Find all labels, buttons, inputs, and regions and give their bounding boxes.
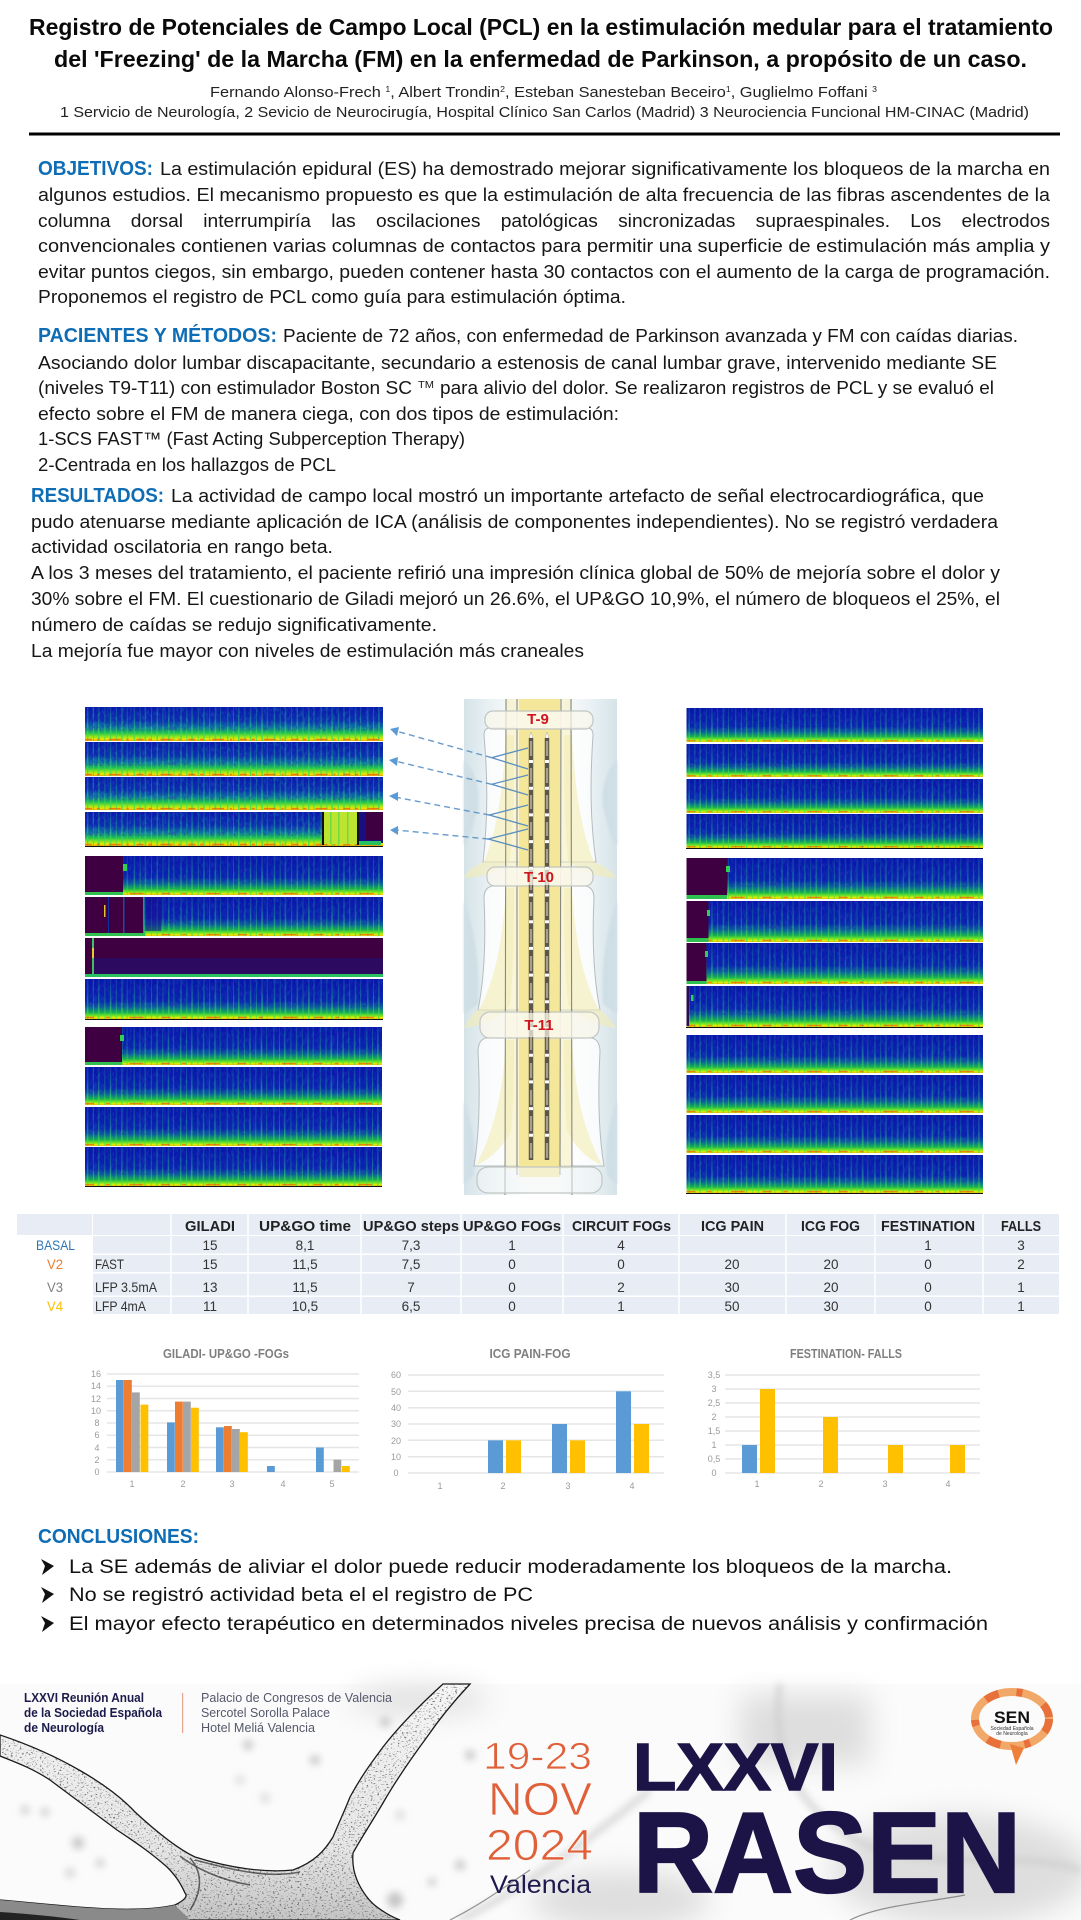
spectrograms: left column: [85, 707, 383, 1186]
row: V4: 10,5: [292, 1299, 318, 1314]
text block: resultados: pudo atenuarse mediante aplicación de ICA (análisis de componentes independientes). No se registró verdadera: [31, 512, 999, 532]
row: V4: 6,5: [402, 1299, 420, 1314]
row: V3: 7: [407, 1280, 415, 1295]
dates: 2024: [486, 1821, 593, 1870]
blurred neuron background: [21, 1684, 1081, 1920]
spectrograms: right column: [686, 708, 983, 1194]
bar chart: GILADI UP&GO FOGs: 0: [94, 1467, 100, 1477]
text block: objetivos: convencionales contienen varias columnas de contactos para permitir una superficie de estimulación más amplia y: [38, 236, 1050, 256]
table header: CIRCUIT FOGs: [572, 1218, 671, 1235]
spine illustration with electrode: [464, 699, 617, 1195]
text block: objetivos: columna dorsal interrumpiría las oscilaciones patológicas sincronizadas supraespinales. Los electrodos: [38, 211, 1050, 231]
bar chart: FESTINATION FALLS: 2: [711, 1412, 717, 1422]
bar chart: FESTINATION FALLS: 1,5: [708, 1426, 720, 1436]
authors and affiliations: Fernando Alonso-Frech: [210, 84, 367, 101]
text block: resultados: A los 3 meses del tratamiento, el paciente refirió una impresión clínica global de 50% de mejoría sobre el dolor y: [31, 563, 1000, 583]
row: V2: 2: [1017, 1257, 1025, 1272]
vertebra outlines: [474, 728, 604, 1166]
row: V2: 0: [617, 1257, 625, 1272]
text block: pacientes y metodos: 1-SCS FAST™ (Fast Acting Subperception Therapy): [38, 429, 465, 449]
bar chart: ICG PAIN-FOG: 0: [393, 1468, 399, 1478]
bar chart: ICG PAIN-FOG: 3: [565, 1481, 571, 1491]
text block: resultados: número de caídas se redujo significativamente.: [31, 615, 437, 635]
row: basal: BASAL: [36, 1237, 75, 1253]
row: V2: 20: [724, 1257, 740, 1272]
SEN logo: de Neurología: [996, 1731, 1028, 1737]
bar chart: GILADI UP&GO FOGs: 14: [91, 1381, 101, 1391]
bar chart: ICG PAIN-FOG: 1: [437, 1481, 443, 1491]
nerve lines: [505, 699, 572, 1195]
bar chart: GILADI UP&GO FOGs: 8: [94, 1418, 100, 1428]
text block: pacientes y metodos: efecto sobre el FM de manera ciega, con dos tipos de estimulación:: [38, 404, 619, 424]
row: V4: 30: [823, 1299, 839, 1314]
title: [29, 14, 1053, 72]
bar chart: GILADI UP&GO FOGs: 3: [229, 1479, 235, 1489]
bar chart: ICG PAIN-FOG: 10: [391, 1452, 401, 1462]
data table: [17, 1214, 1059, 1314]
text block: resultados: La actividad de campo local mostró un importante artefacto de señal electrocardiográfica, que: [171, 486, 984, 506]
table header: FESTINATION: [881, 1218, 975, 1235]
level label T-9: T-9: [527, 711, 549, 728]
text block: resultados: [31, 485, 1000, 661]
event name: LXXVI: [633, 1730, 838, 1805]
row: V4: 11: [203, 1299, 217, 1314]
text block: pacientes y metodos: 2-Centrada en los hallazgos de PCL: [38, 455, 336, 475]
row: V2: FAST: [95, 1256, 124, 1272]
dates: Valencia: [490, 1871, 591, 1899]
bar chart: GILADI UP&GO FOGs: 16: [91, 1369, 101, 1379]
arrows: contact pairs to spectrograms: [389, 727, 528, 850]
row: V2: 11,5: [292, 1257, 318, 1272]
authors and affiliations: , Albert Trondin: [390, 84, 500, 101]
SEN logo: [975, 1692, 1049, 1765]
authors and affiliations: 1 Servicio de Neurología, 2 Sevicio de Neurocirugía, Hospital Clínico San Carlos (Madrid) 3 Neurociencia Funcional HM-CINAC (Madrid): [60, 104, 1029, 121]
row: V3: V3: [47, 1279, 63, 1295]
SEN logo: Sociedad Española: [990, 1726, 1034, 1732]
venue block: de Neurología: [24, 1720, 105, 1735]
text block: resultados: La mejoría fue mayor con niveles de estimulación más craneales: [31, 641, 584, 661]
row: V3: LFP 3.5mA: [95, 1279, 158, 1295]
table header: UP&GO time: [259, 1218, 351, 1235]
bar chart: FESTINATION FALLS: [708, 1346, 980, 1489]
text block: conclusiones: CONCLUSIONES:: [38, 1526, 199, 1548]
row: basal: 15: [202, 1238, 218, 1253]
title: Registro de Potenciales de Campo Local (PCL) en la estimulación medular para el tratamiento: [29, 14, 1053, 40]
bar chart: ICG PAIN-FOG: ICG PAIN-FOG: [490, 1346, 570, 1361]
bar chart: GILADI UP&GO FOGs: [91, 1346, 359, 1489]
table header: [185, 1218, 1041, 1235]
row: V2: 0: [508, 1257, 516, 1272]
authors and affiliations: 2: [500, 85, 506, 94]
authors and affiliations: 1: [726, 85, 731, 94]
bar chart: FESTINATION FALLS: FESTINATION- FALLS: [790, 1346, 902, 1361]
row: V4: 50: [724, 1299, 740, 1314]
row: V4: 1: [617, 1299, 625, 1314]
row: V2: 20: [823, 1257, 839, 1272]
bar chart: FESTINATION FALLS: 2,5: [708, 1398, 720, 1408]
spinal cord: [519, 699, 560, 1177]
bar chart: ICG PAIN-FOG: 40: [391, 1403, 401, 1413]
dates: 19-23: [483, 1736, 592, 1778]
row: basal: 1: [508, 1238, 516, 1253]
text block: resultados: 30% sobre el FM. El cuestionario de Giladi mejoró un 26.6%, el UP&GO 10,9%, el número de bloqueos el 25%, el: [31, 589, 1000, 609]
disc overlays at lead: [515, 712, 563, 1037]
venue block: LXXVI Reunión Anual: [24, 1690, 144, 1705]
text block: pacientes y metodos: PACIENTES Y MÉTODOS:: [38, 324, 277, 347]
bar chart: GILADI UP&GO FOGs: 10: [91, 1406, 101, 1416]
bar chart: ICG PAIN-FOG: 60: [391, 1370, 401, 1380]
row: V2: 0: [924, 1257, 932, 1272]
text block: pacientes y metodos: (niveles T9-T11) con estimulador Boston SC: [38, 378, 412, 398]
bar chart: FESTINATION FALLS: 0: [711, 1468, 717, 1478]
bar chart: ICG PAIN-FOG: 20: [391, 1436, 401, 1446]
text block: objetivos: La estimulación epidural (ES) ha demostrado mejorar significativamente los bloqueos de la marcha en: [160, 159, 1050, 179]
text block: conclusiones: La SE además de aliviar el dolor puede reducir moderadamente los bloqueos de la marcha.: [69, 1557, 952, 1578]
venue block: Palacio de Congresos de Valencia: [201, 1690, 393, 1705]
SEN logo: SEN: [994, 1708, 1030, 1727]
table header: ICG FOG: [801, 1218, 860, 1235]
dates: [483, 1736, 593, 1899]
bar chart: GILADI UP&GO FOGs: 1: [129, 1479, 135, 1489]
text block: conclusiones: No se registró actividad beta el el registro de PC: [69, 1585, 533, 1606]
row: basal: 8,1: [296, 1238, 314, 1253]
bar chart: GILADI UP&GO FOGs: 12: [91, 1394, 101, 1404]
row: basal: 3: [1017, 1238, 1025, 1253]
row: V3: 30: [724, 1280, 740, 1295]
bar chart: GILADI UP&GO FOGs: 6: [94, 1430, 100, 1440]
text block: objetivos: [38, 158, 1051, 307]
row: V4: 0: [924, 1299, 932, 1314]
table header: UP&GO steps: [363, 1218, 459, 1235]
venue block: Sercotel Sorolla Palace: [201, 1705, 330, 1720]
neuron soma and dendrites: [0, 1684, 470, 1920]
footer banner: [0, 1684, 1081, 1920]
bar chart: FESTINATION FALLS: 3: [711, 1384, 717, 1394]
bar chart: FESTINATION FALLS: 0,5: [708, 1454, 720, 1464]
row: basal: 1: [924, 1238, 932, 1253]
table header: FALLS: [1001, 1218, 1041, 1235]
bar chart: FESTINATION FALLS: 3: [882, 1479, 888, 1489]
bar chart: FESTINATION FALLS: 4: [945, 1479, 951, 1489]
row: V3: 11,5: [292, 1280, 318, 1295]
row: V4: V4: [47, 1298, 63, 1314]
text block: resultados: RESULTADOS:: [31, 485, 164, 507]
bar chart: GILADI UP&GO FOGs: 2: [180, 1479, 186, 1489]
text block: resultados: actividad oscilatoria en rango beta.: [31, 537, 333, 557]
row: V3: 20: [823, 1280, 839, 1295]
electrode leads: [529, 732, 549, 1160]
table header: UP&GO FOGs: [463, 1218, 561, 1235]
authors and affiliations: , Esteban Sanesteban Beceiro: [505, 84, 726, 101]
bar chart: FESTINATION FALLS: 1: [711, 1440, 717, 1450]
text block: objetivos: evitar puntos ciegos, sin embargo, pueden contener hasta 30 contactos con el aumento de la carga de programación.: [38, 262, 1050, 282]
table header: ICG PAIN: [701, 1218, 764, 1235]
bar chart: FESTINATION FALLS: 3,5: [708, 1370, 720, 1380]
venue block: [24, 1690, 393, 1735]
bar chart: GILADI UP&GO FOGs: 4: [280, 1479, 286, 1489]
text block: conclusiones: [38, 1526, 988, 1635]
authors and affiliations: 3: [872, 85, 878, 94]
bar chart: ICG PAIN-FOG: 4: [629, 1481, 635, 1491]
row: V3: 2: [617, 1280, 625, 1295]
row: V4: LFP 4mA: [95, 1298, 147, 1314]
event name: RASEN: [633, 1790, 1021, 1917]
row: basal: [36, 1237, 1025, 1253]
venue block: Hotel Meliá Valencia: [201, 1720, 316, 1735]
row: V3: [47, 1279, 1025, 1295]
text block: conclusiones: El mayor efecto terapéutico en determinados niveles precisa de nuevos análisis y confirmación: [69, 1614, 988, 1635]
row: V4: 0: [508, 1299, 516, 1314]
row: V2: 15: [202, 1257, 218, 1272]
row: V4: [47, 1298, 1025, 1314]
row: basal: 4: [617, 1238, 625, 1253]
bar chart: GILADI UP&GO FOGs: 4: [94, 1443, 100, 1453]
venue block: de la Sociedad Española: [24, 1705, 163, 1720]
bar chart: ICG PAIN-FOG: [391, 1346, 664, 1491]
bar chart: ICG PAIN-FOG: 50: [391, 1387, 401, 1397]
authors and affiliations: [60, 84, 1029, 121]
text block: pacientes y metodos: TM: [418, 380, 434, 391]
text block: objetivos: OBJETIVOS:: [38, 158, 153, 180]
text block: pacientes y metodos: Asociando dolor lumbar discapacitante, secundario a estenosis de canal lumbar grave, intervenido mediante SE: [38, 353, 997, 373]
bar chart: ICG PAIN-FOG: 2: [500, 1481, 506, 1491]
row: V2: V2: [47, 1256, 63, 1272]
level label T-10: T-10: [524, 869, 554, 886]
authors and affiliations: , Guglielmo Foffani: [731, 84, 872, 101]
title: del 'Freezing' de la Marcha (FM) en la enfermedad de Parkinson, a propósito de un caso.: [54, 46, 1027, 72]
text block: objetivos: Proponemos el registro de PCL como guía para estimulación óptima.: [38, 287, 626, 307]
row: V2: 7,5: [402, 1257, 420, 1272]
table header: GILADI: [185, 1218, 235, 1235]
intervertebral discs: [477, 711, 602, 1193]
text block: objetivos: algunos estudios. El mecanismo propuesto es que la estimulación de alta frecuencia de las fibras ascendentes de la: [38, 185, 1051, 205]
row: V3: 13: [202, 1280, 218, 1295]
row: basal: 7,3: [402, 1238, 420, 1253]
row: V3: 0: [508, 1280, 516, 1295]
text block: pacientes y metodos: Paciente de 72 años, con enfermedad de Parkinson avanzada y FM con caídas diarias.: [283, 326, 1018, 346]
bar chart: FESTINATION FALLS: 1: [754, 1479, 760, 1489]
bar chart: ICG PAIN-FOG: 30: [391, 1419, 401, 1429]
nerve roots: [464, 699, 617, 1169]
bar chart: FESTINATION FALLS: 2: [818, 1479, 824, 1489]
row: V4: 1: [1017, 1299, 1025, 1314]
bar chart: GILADI UP&GO FOGs: 5: [329, 1479, 335, 1489]
text block: pacientes y metodos: [38, 324, 1018, 475]
level label T-11: T-11: [524, 1017, 554, 1034]
row: V2: [47, 1256, 1025, 1272]
dates: NOV: [488, 1773, 592, 1825]
bar chart: GILADI UP&GO FOGs: GILADI- UP&GO -FOGs: [163, 1346, 289, 1361]
bar chart: GILADI UP&GO FOGs: 2: [94, 1455, 100, 1465]
authors and affiliations: 1: [385, 85, 391, 94]
text block: pacientes y metodos: para alivio del dolor. Se realizaron registros de PCL y se evaluó el: [440, 378, 994, 398]
row: V3: 1: [1017, 1280, 1025, 1295]
event name: [633, 1730, 1021, 1917]
row: V3: 0: [924, 1280, 932, 1295]
